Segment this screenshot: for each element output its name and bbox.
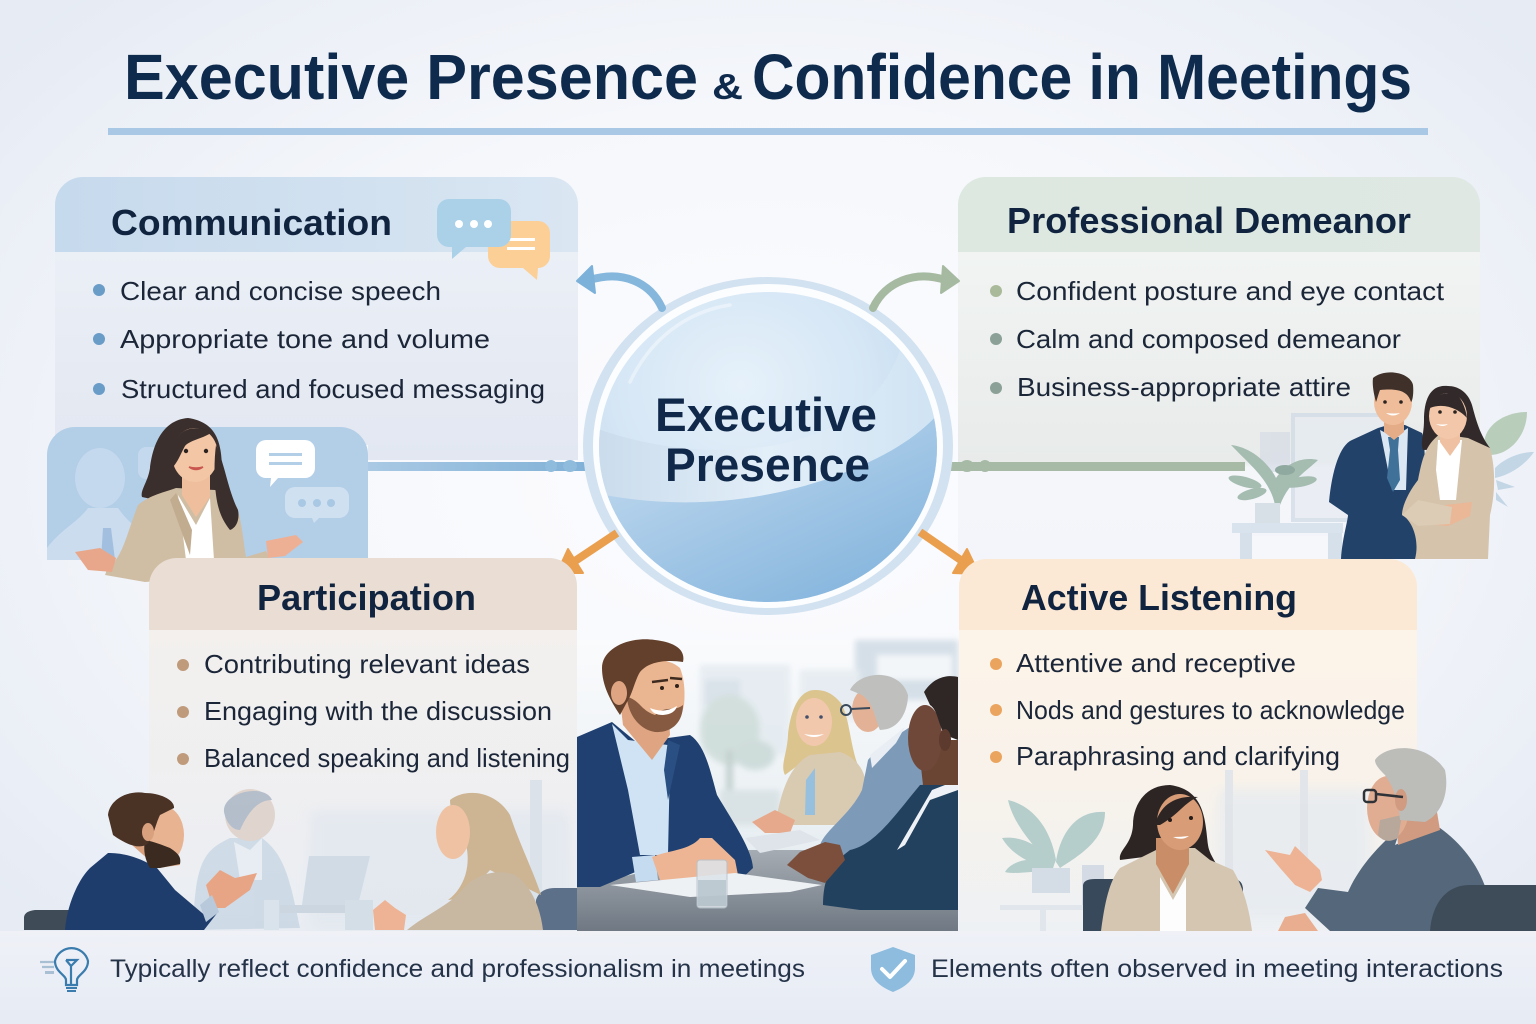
plant left — [1227, 445, 1318, 523]
connector: communication to center — [368, 460, 594, 472]
participation bullets: Contributing relevant ideas — [204, 649, 530, 679]
title: & — [712, 66, 743, 107]
communication bullets: Structured and focused messaging — [121, 374, 545, 404]
inner sphere — [599, 292, 937, 602]
paper on table behind — [745, 830, 820, 853]
arrow: to communication — [577, 266, 662, 308]
faded background office — [193, 780, 570, 930]
man in navy suit — [1329, 372, 1425, 559]
panel: communication — [55, 177, 578, 460]
illustration: presenter with speech bubbles — [47, 418, 368, 582]
arrow: to demeanor — [873, 266, 959, 308]
panel: active listening — [959, 559, 1417, 931]
participation heading: Participation — [257, 577, 476, 618]
title underline — [108, 128, 1428, 135]
blurred buildings — [700, 640, 958, 825]
bearded man — [65, 792, 257, 930]
participation bullets: Engaging with the discussion — [204, 696, 552, 726]
icon: lightbulb — [40, 948, 88, 991]
blond colleague — [752, 690, 866, 833]
participation bullets — [177, 649, 570, 773]
window backdrop — [577, 640, 958, 931]
illustration: business couple with plants — [1227, 372, 1534, 560]
circle label: Executive — [655, 388, 877, 441]
table — [577, 850, 958, 931]
office backdrop — [1232, 415, 1387, 560]
water glass — [697, 860, 727, 908]
presenter figure — [75, 418, 303, 582]
illustration: participation discussion — [24, 780, 577, 930]
active listening bullets: Attentive and receptive — [1016, 648, 1296, 678]
demeanor heading: Professional Demeanor — [1007, 200, 1411, 241]
center circle: Executive Presence — [583, 277, 953, 620]
main smiling man — [577, 639, 753, 887]
gray haired colleague — [820, 675, 938, 857]
chair right — [536, 888, 577, 930]
silhouette of colleague — [47, 447, 164, 560]
sphere swooshes — [590, 305, 945, 620]
white gap — [593, 284, 943, 608]
panel: participation — [149, 558, 577, 931]
participation header band — [149, 558, 577, 630]
chair — [24, 910, 111, 930]
active listening heading: Active Listening — [1021, 577, 1297, 618]
communication panel body — [55, 252, 578, 460]
outer ring — [583, 277, 953, 615]
older man with glasses — [1265, 748, 1495, 931]
dark suited colleague — [787, 676, 958, 910]
paper — [610, 873, 822, 897]
communication bullets — [93, 276, 545, 404]
panel: professional demeanor — [958, 177, 1480, 560]
title — [124, 41, 1412, 113]
participation bullets: Balanced speaking and listening — [204, 743, 570, 773]
icon: shield with check — [871, 947, 915, 992]
communication bullets: Clear and concise speech — [120, 276, 441, 306]
arrow: to active listening — [920, 532, 979, 574]
speech bubble white — [256, 440, 315, 487]
active listening bullets: Nods and gestures to acknowledge — [1016, 695, 1405, 725]
woman in beige — [1101, 785, 1252, 931]
blond woman — [373, 793, 543, 930]
circle label: Presence — [665, 438, 870, 491]
active listening bullets — [990, 648, 1405, 771]
demeanor bullets: Business-appropriate attire — [1017, 372, 1351, 402]
footer band — [0, 931, 1536, 1024]
active listening body — [959, 630, 1417, 931]
footer note right: Elements often observed in meeting interactions — [931, 955, 1503, 983]
woman in beige blazer — [1402, 386, 1494, 559]
arrow: to participation — [557, 533, 617, 573]
photo: central meeting scene — [577, 639, 958, 931]
demeanor panel body — [958, 252, 1480, 560]
title: Executive Presence — [124, 41, 698, 113]
speech bubble dots — [285, 487, 349, 523]
circle label — [655, 388, 877, 491]
connector: demeanor to center — [943, 460, 1245, 472]
chair front right — [1430, 885, 1536, 931]
participation body — [149, 630, 577, 931]
presenter backdrop — [47, 427, 368, 560]
communication header band — [55, 177, 578, 252]
active listening bullets: Paraphrasing and clarifying — [1016, 741, 1340, 771]
communication bullets: Appropriate tone and volume — [120, 324, 490, 354]
footer note left: Typically reflect confidence and professionalism in meetings — [110, 955, 805, 983]
plant — [1002, 800, 1105, 905]
chair behind woman — [1083, 879, 1243, 931]
illustration: active listening conversation — [1000, 748, 1536, 931]
plant right — [1484, 412, 1534, 507]
title: Confidence in Meetings — [752, 41, 1412, 113]
active listening header band — [959, 559, 1417, 630]
demeanor bullets — [990, 276, 1445, 402]
faded office — [1000, 770, 1370, 931]
demeanor bullets: Confident posture and eye contact — [1016, 276, 1445, 306]
demeanor header band — [958, 177, 1480, 252]
icon: chat bubbles — [437, 199, 550, 280]
demeanor bullets: Calm and composed demeanor — [1016, 324, 1401, 354]
communication heading: Communication — [111, 202, 392, 243]
